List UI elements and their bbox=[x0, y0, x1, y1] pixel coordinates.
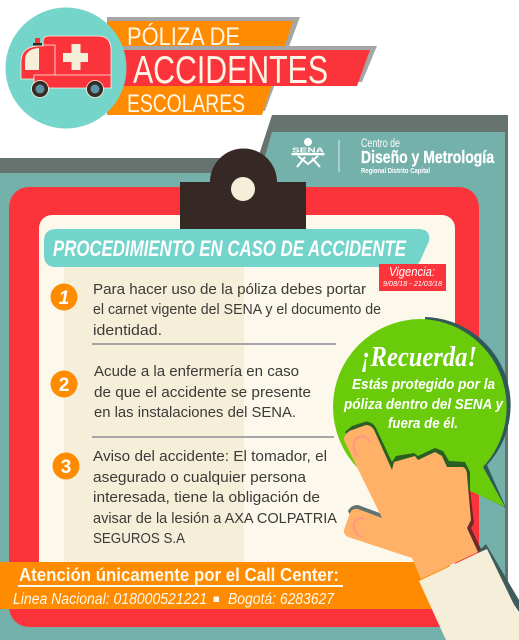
call center bar: Bogotá: 6283627 bbox=[228, 591, 335, 608]
callout: recuerda bubble: fuera de él. bbox=[388, 416, 458, 432]
step 3 text: avisar de la lesión a AXA COLPATRIA bbox=[93, 510, 338, 527]
step 2 bbox=[50, 363, 311, 421]
step 2 text: Acude a la enfermería en caso bbox=[94, 363, 299, 380]
logo text: Centro de Diseño y Metrología bbox=[338, 138, 494, 175]
icon: clipboard clip bbox=[180, 148, 306, 230]
callout: recuerda bubble: póliza dentro del SENA y bbox=[343, 397, 504, 413]
title line: Póliza de: PÓLIZA DE bbox=[127, 22, 240, 51]
logo: SENA: SENA bbox=[292, 148, 324, 154]
badge: vigencia: Vigencia: bbox=[389, 265, 435, 279]
title line: Accidentes: ACCIDENTES bbox=[133, 49, 328, 92]
step 1 text: Para hacer uso de la póliza debes portar bbox=[93, 281, 366, 298]
step 1 text: identidad. bbox=[93, 322, 162, 339]
number badge 1 bbox=[50, 284, 78, 310]
number badge 3: 3 bbox=[61, 457, 71, 478]
heading: procedimiento: PROCEDIMIENTO EN CASO DE ACCIDENTE bbox=[53, 236, 407, 261]
step 3 bbox=[52, 448, 338, 547]
logo: SENA bbox=[292, 138, 324, 167]
number badge 1: 1 bbox=[59, 288, 69, 309]
callout: recuerda bubble: ¡Recuerda! bbox=[361, 341, 477, 373]
call center bar: Atención únicamente por el Call Center: bbox=[19, 564, 339, 585]
number badge 3 bbox=[52, 452, 80, 480]
call center bar: Linea Nacional: 018000521221 bbox=[13, 591, 207, 608]
step 2 text: en las instalaciones del SENA. bbox=[94, 404, 296, 421]
step 3 text: Aviso del accidente: El tomador, el bbox=[93, 448, 327, 465]
step 2 text: de que el accidente se presente bbox=[94, 384, 311, 401]
step 3 text: asegurado o cualquier persona bbox=[93, 469, 307, 486]
icon: pointing hand bbox=[344, 422, 482, 579]
title line: Escolares: ESCOLARES bbox=[127, 90, 245, 118]
step 3 text: SEGUROS S.A bbox=[93, 530, 186, 547]
badge: vigencia bbox=[379, 264, 446, 291]
logo text: Centro de Diseño y Metrología: Centro de bbox=[361, 138, 400, 150]
number badge 2 bbox=[50, 370, 78, 398]
step 3 text: interesada, tiene la obligación de bbox=[93, 489, 320, 506]
step 1 text: el carnet vigente del SENA y el documento de bbox=[93, 301, 381, 318]
icon: shirt sleeve bbox=[419, 544, 519, 640]
step 1 bbox=[50, 281, 381, 339]
call center bar bbox=[0, 562, 450, 609]
title banner bbox=[107, 17, 377, 118]
heading: procedimiento bbox=[44, 229, 429, 267]
badge: vigencia: 9/08/18 - 21/03/18 bbox=[383, 279, 443, 288]
callout: recuerda bubble: Estás protegido por la bbox=[352, 377, 495, 393]
callout: recuerda bubble bbox=[333, 317, 511, 508]
number badge 2: 2 bbox=[59, 375, 69, 396]
logo text: Centro de Diseño y Metrología: Regional Distrito Capital bbox=[361, 166, 430, 175]
icon: ambulance bbox=[6, 8, 126, 128]
